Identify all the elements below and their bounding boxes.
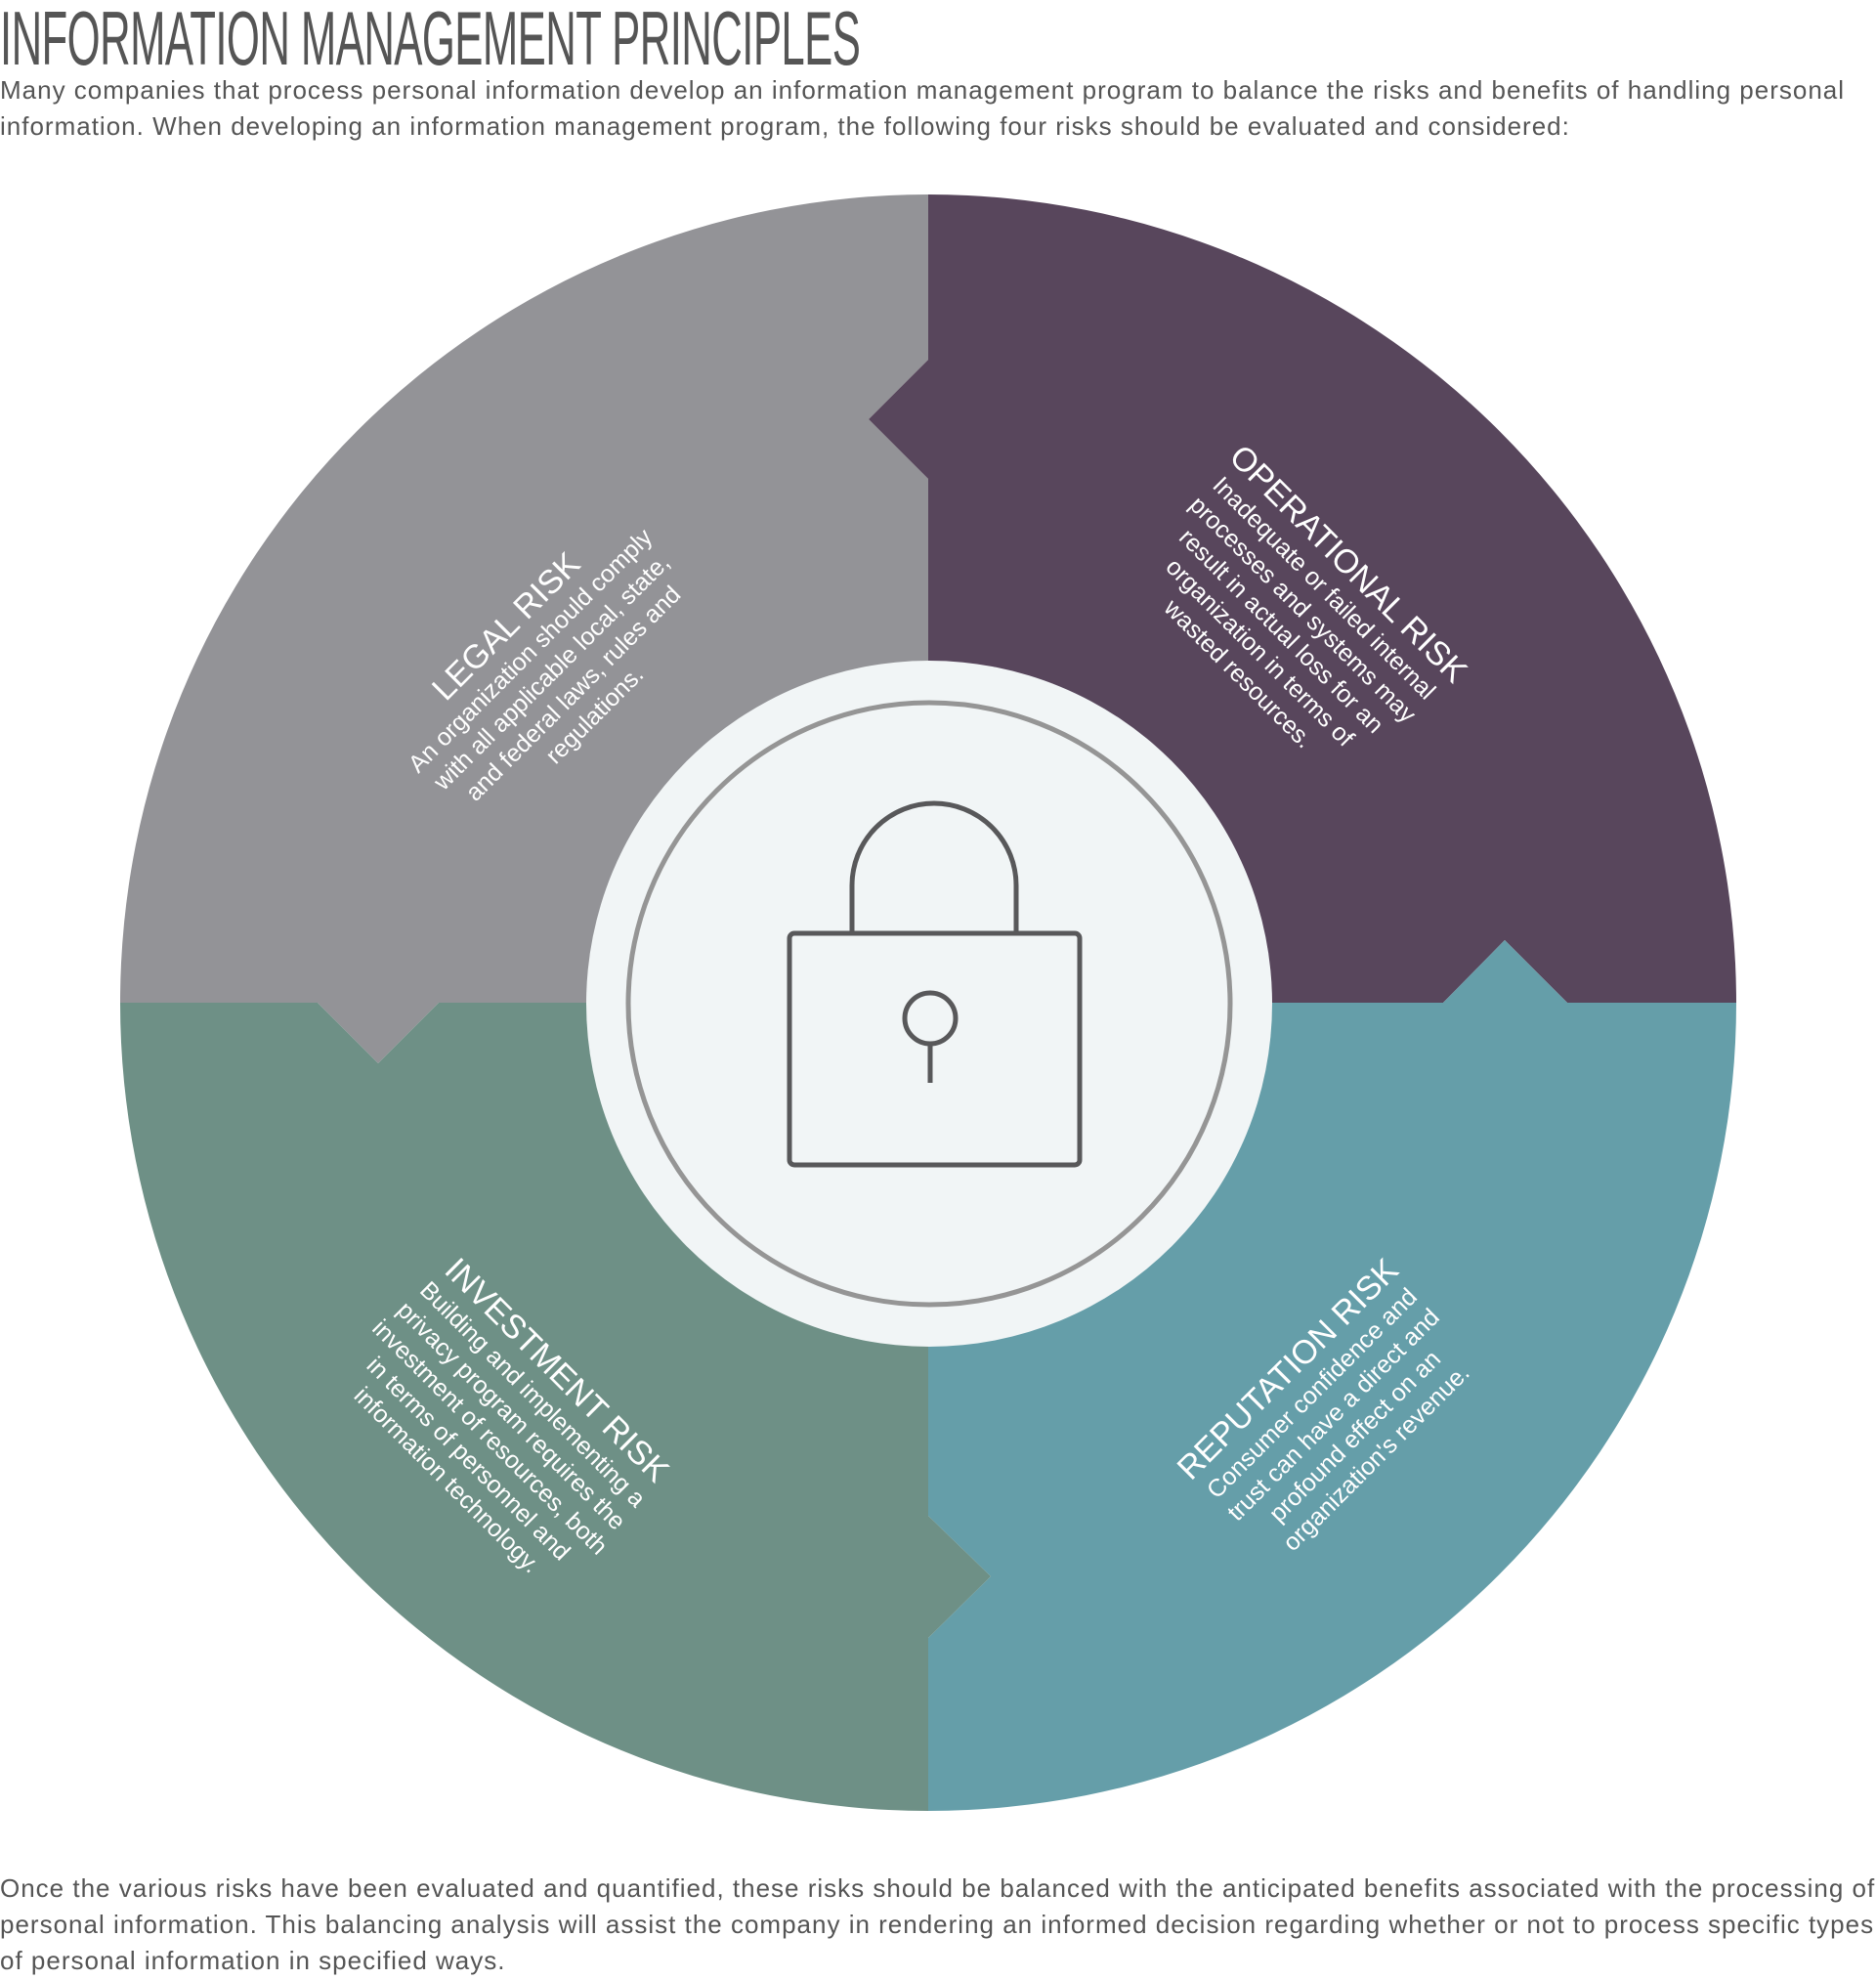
closing text xyxy=(0,1873,1875,1975)
text block: investment risk: Building and implementing a xyxy=(414,1276,651,1513)
text block: operational risk: wasted resources. xyxy=(1159,594,1318,753)
text block: reputation risk: Consumer confidence and xyxy=(1202,1283,1423,1504)
text block: legal risk: with all applicable local, state, xyxy=(428,548,675,796)
text block: legal risk: LEGAL RISK xyxy=(425,545,587,708)
text block: reputation risk: profound effect on an xyxy=(1263,1345,1446,1527)
text block: legal risk: and federal laws, rules and xyxy=(460,581,686,806)
text block: legal risk: An organization should comply xyxy=(404,524,658,778)
icon: padlock xyxy=(789,803,1080,1165)
text block: investment risk: investment of resources, both xyxy=(366,1314,613,1561)
text block: operational risk: processes and systems may xyxy=(1184,491,1422,728)
text block: investment risk: information technology. xyxy=(349,1382,545,1578)
closing text: personal information. This balancing analysis will assist the company in rendering an informed decision regarding whether or not to process specific types xyxy=(0,1910,1874,1939)
text block: reputation risk: organization's revenue. xyxy=(1278,1359,1475,1557)
text block: operational risk xyxy=(1159,438,1474,753)
panel: operational risk quadrant xyxy=(869,194,1736,1003)
text block: investment risk: INVESTMENT RISK xyxy=(438,1251,676,1489)
panel: investment risk quadrant xyxy=(120,1003,991,1811)
text block: legal risk: regulations. xyxy=(540,661,649,769)
text block: operational risk: Inadequate or failed internal xyxy=(1208,471,1441,705)
text block: investment risk xyxy=(349,1251,676,1578)
text block: operational risk: organization in terms of xyxy=(1161,553,1359,752)
text block: reputation risk xyxy=(1171,1252,1475,1557)
intro text: information. When developing an information management program, the following four risks should be evaluated and considered: xyxy=(0,111,1570,141)
center circle xyxy=(586,661,1272,1347)
text block: operational risk: result in actual loss for an xyxy=(1173,524,1388,739)
text block: investment risk: in terms of personnel and xyxy=(362,1352,576,1566)
intro text: Many companies that process personal information develop an information management program to balance the risks and benefits of handling personal xyxy=(0,75,1845,105)
text block: reputation risk: trust can have a direct and xyxy=(1222,1304,1445,1527)
text block: reputation risk: REPUTATION RISK xyxy=(1171,1252,1406,1487)
text block: operational risk: OPERATIONAL RISK xyxy=(1222,438,1474,690)
text block: investment risk: privacy program requires the xyxy=(392,1296,631,1535)
panel: reputation risk quadrant xyxy=(928,940,1736,1811)
intro text xyxy=(0,75,1845,141)
panel: legal risk quadrant xyxy=(120,194,928,1063)
closing text: Once the various risks have been evaluated and quantified, these risks should be balanced with the anticipated benefits associated with the processing of xyxy=(0,1873,1875,1903)
closing text: of personal information in specified ways. xyxy=(0,1946,505,1975)
